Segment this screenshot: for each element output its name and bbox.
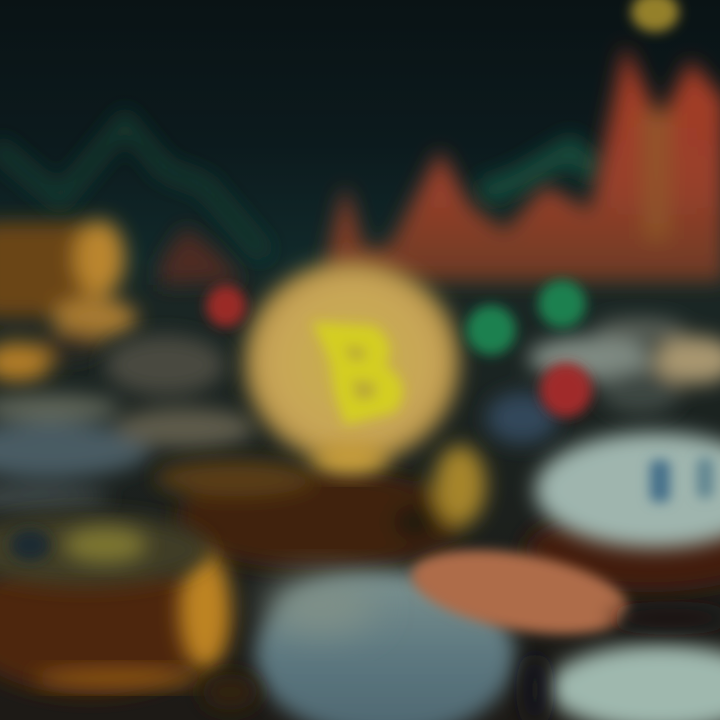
gold bitcoin coin [244, 260, 460, 474]
line chart: green ridges [0, 122, 600, 255]
silver coin right with letters [525, 432, 720, 592]
icon: red ball left [206, 285, 246, 327]
left bottom gold coin stack [0, 514, 231, 695]
left silver coins [0, 335, 255, 510]
icon: red ball right [540, 363, 592, 417]
area chart: red peaks [160, 45, 720, 285]
icon: green ball centre [466, 305, 516, 355]
middle brown coin stack [155, 445, 486, 570]
copper coin [405, 535, 635, 649]
left gold stack [0, 220, 137, 382]
right background coins [486, 318, 720, 444]
bottom dark shadows [202, 608, 720, 720]
silver coin bottom centre [255, 570, 515, 720]
icon: yellow B symbol [312, 322, 403, 425]
icon: green ball upper right [538, 280, 586, 328]
silver coin bottom right [548, 644, 720, 720]
icon: yellow coin at chart peak [631, 0, 679, 32]
